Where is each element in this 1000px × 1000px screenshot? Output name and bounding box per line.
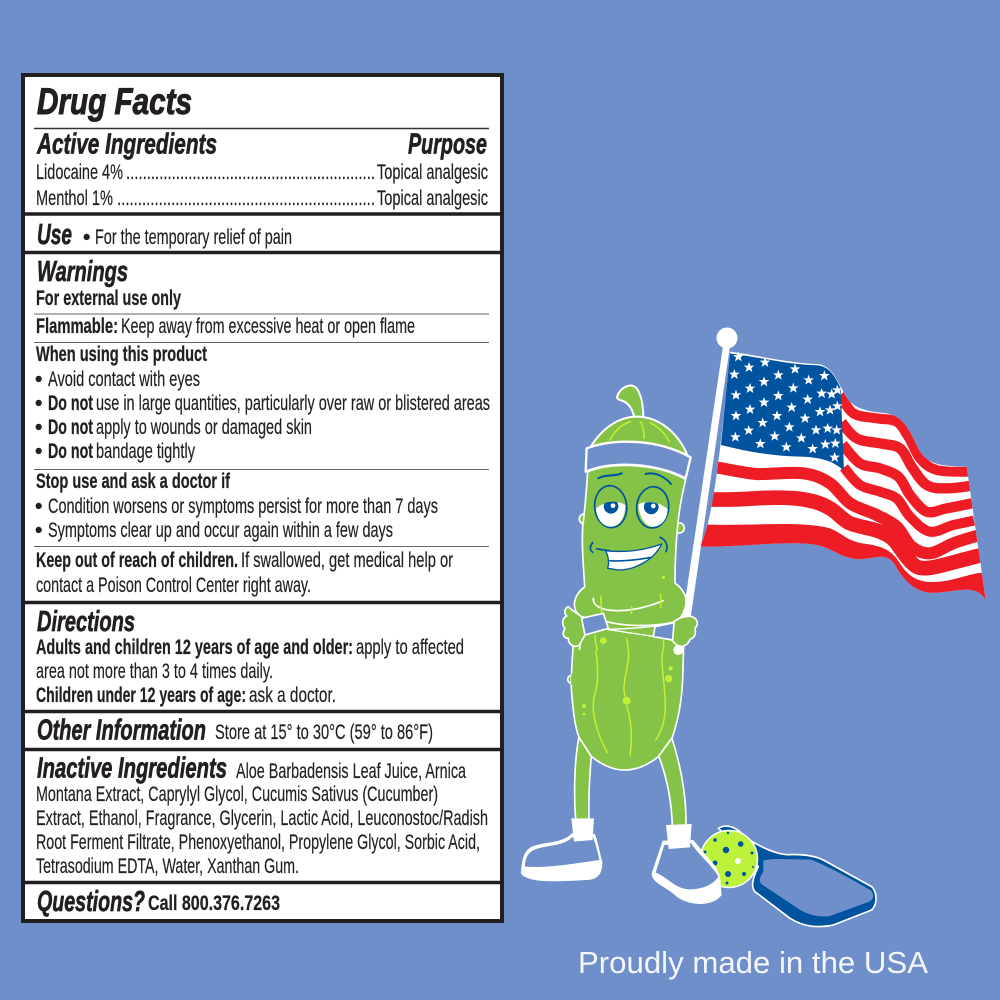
- body: [579, 465, 686, 650]
- section: active ingredients: ..............................................................: [117, 187, 375, 210]
- right hand: [672, 616, 697, 646]
- section: warnings: Do not: [48, 392, 93, 415]
- section: warnings: Condition worsens or symptoms persist for more than 7 days: [48, 495, 438, 518]
- cap lines: [610, 422, 669, 442]
- section: warnings: [35, 256, 490, 597]
- section: other information: Store at 15° to 30°C (59° to 86°F): [215, 721, 433, 744]
- section: warnings: Keep out of reach of children.: [36, 549, 238, 572]
- upper body: [563, 386, 697, 655]
- section: directions: Children under 12 years of age:: [36, 684, 246, 707]
- section: warnings: Symptoms clear up and occur again within a few days: [48, 519, 393, 542]
- section: warnings: use in large quantities, particularly over raw or blistered areas: [96, 392, 490, 415]
- section: warnings: Do not: [48, 440, 93, 463]
- left eye: [593, 484, 628, 529]
- section: active ingredients: Topical analgesic: [377, 161, 488, 184]
- section: warnings: Stop use and ask a doctor if: [36, 470, 231, 493]
- section: active ingredients: Purpose: [408, 128, 487, 160]
- left leg: [575, 737, 592, 820]
- section: use: Use: [37, 219, 72, 251]
- section: warnings: apply to wounds or damaged skin: [96, 416, 312, 439]
- section: directions: Adults and children 12 years of age and older:: [36, 636, 353, 659]
- section: use: •: [83, 226, 90, 249]
- section: active ingredients: Menthol 1%: [36, 187, 113, 210]
- headband: [586, 442, 691, 478]
- section: directions: ask a doctor.: [249, 684, 336, 707]
- flag blue canton: [721, 353, 844, 471]
- tagline: Proudly made in the USA: [578, 945, 928, 980]
- pickle character: [521, 386, 722, 904]
- left wristband: [582, 613, 608, 635]
- section: other information: [37, 714, 433, 746]
- section: warnings: Warnings: [37, 256, 128, 288]
- icon: pickleball: [700, 830, 758, 888]
- icon: american flag: [700, 351, 987, 600]
- paddle face: [760, 859, 873, 916]
- section: inactive ingredients: Root Ferment Filtrate, Phenoxyethanol, Propylene Glycol, Sorbic Acid,: [36, 831, 480, 854]
- section: inactive ingredients: Extract, Ethanol, Fragrance, Glycerin, Lactic Acid, Leuconostoc/Radish: [36, 807, 488, 830]
- stem: [617, 386, 643, 419]
- section: active ingredients: Active Ingredients: [36, 128, 217, 160]
- flag stars: [729, 351, 843, 462]
- section: warnings: Flammable:: [36, 315, 118, 338]
- folded arms: [563, 583, 697, 655]
- flag red stripes: [700, 395, 987, 600]
- section: inactive ingredients: [36, 752, 488, 878]
- section: active ingredients: ............................................................: [126, 161, 375, 184]
- section: warnings: Keep away from excessive heat or open flame: [121, 315, 415, 338]
- section: warnings: For external use only: [36, 287, 181, 310]
- section: warnings: bandage tightly: [96, 440, 195, 463]
- section: warnings: •: [35, 392, 42, 415]
- side bump: [568, 675, 576, 683]
- section: warnings: If swallowed, get medical help or: [241, 549, 453, 572]
- section: active ingredients: Topical analgesic: [377, 187, 488, 210]
- section: inactive ingredients: Montana Extract, Caprylyl Glycol, Cucumis Sativus (Cucumber): [36, 783, 438, 806]
- lower body and legs: [521, 633, 722, 904]
- section: use: For the temporary relief of pain: [95, 226, 292, 249]
- right sock: [666, 824, 692, 849]
- section: questions: [37, 886, 280, 918]
- section: warnings: •: [35, 519, 42, 542]
- section: questions: Questions?: [37, 886, 145, 918]
- section: directions: [36, 606, 464, 707]
- section: directions: apply to affected: [356, 636, 464, 659]
- left hand: [563, 607, 585, 646]
- left sock: [571, 818, 594, 842]
- section: active ingredients: Lidocaine 4%: [36, 161, 123, 184]
- section: directions: Directions: [37, 606, 135, 638]
- right eye: [635, 485, 670, 529]
- right leg: [658, 737, 686, 827]
- belly markings: [582, 650, 673, 756]
- section: warnings: Avoid contact with eyes: [48, 368, 200, 391]
- chest markings: [595, 576, 665, 650]
- section: warnings: •: [35, 495, 42, 518]
- section: warnings: •: [35, 368, 42, 391]
- section: inactive ingredients: Tetrasodium EDTA, Water, Xanthan Gum.: [36, 855, 299, 878]
- section: use: [37, 219, 292, 251]
- section: warnings: •: [35, 416, 42, 439]
- left shoe: [521, 833, 602, 881]
- brows: [598, 473, 671, 484]
- panel: drug facts label: [23, 75, 502, 921]
- section: other information: Other Information: [37, 714, 206, 746]
- section: directions: area not more than 3 to 4 times daily.: [36, 660, 273, 683]
- right shoe: [652, 840, 722, 904]
- ears: [579, 514, 589, 524]
- section: inactive ingredients: Aloe Barbadensis Leaf Juice, Arnica: [236, 760, 466, 783]
- section: inactive ingredients: Inactive Ingredients: [37, 752, 227, 784]
- title: Drug Facts: [37, 81, 192, 122]
- section: warnings: •: [35, 440, 42, 463]
- section: warnings: When using this product: [36, 343, 207, 366]
- section: warnings: contact a Poison Control Center right away.: [36, 574, 311, 597]
- icon: flag pole: [682, 328, 738, 622]
- section: active ingredients: [36, 128, 488, 210]
- belly: [571, 633, 684, 770]
- section: questions: Call 800.376.7263: [148, 892, 280, 915]
- right wristband: [653, 623, 674, 640]
- icon: paddle: [718, 826, 876, 927]
- cap dome: [591, 417, 687, 455]
- section: warnings: Do not: [48, 416, 93, 439]
- mouth: [590, 537, 667, 570]
